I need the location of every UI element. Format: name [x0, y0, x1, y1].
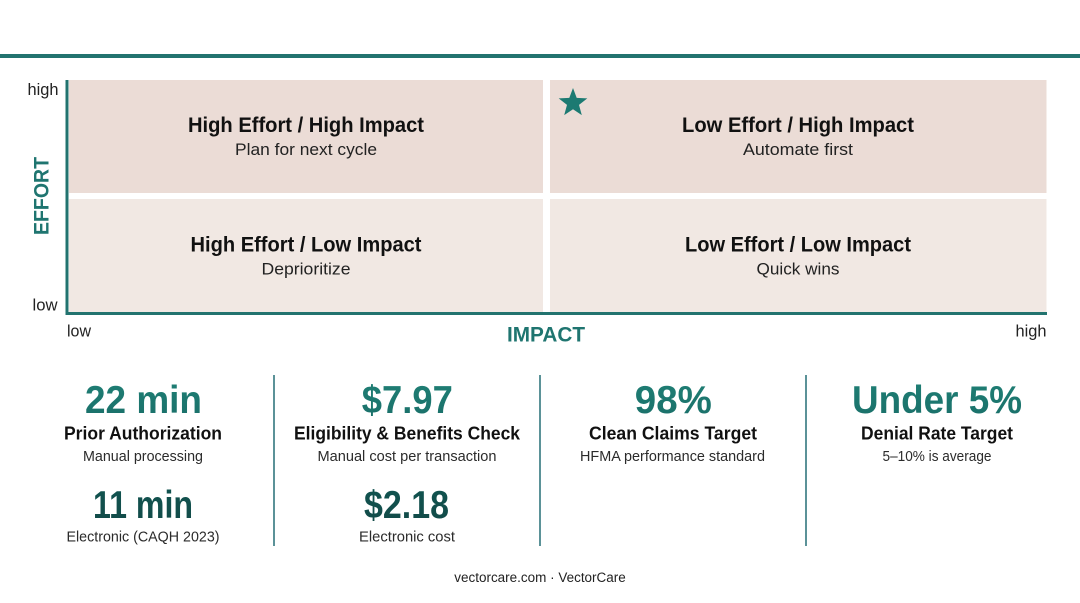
- y axis low label: low: [32, 297, 58, 315]
- divider 3: [805, 375, 807, 546]
- stat: eligibility and benefits check: $7.97: [362, 379, 453, 422]
- stat: clean claims target: HFMA performance standard: [580, 449, 765, 465]
- x axis low label: low: [67, 322, 91, 340]
- stat: prior authorization: Electronic (CAQH 2023): [66, 530, 220, 546]
- quadrant: high effort high impact: High Effort / High Impact: [188, 114, 424, 137]
- stat: denial rate target: [852, 379, 1022, 465]
- stat: prior authorization: Prior Authorization: [64, 423, 222, 443]
- stats row: [64, 375, 1022, 546]
- top rule: [0, 54, 1080, 58]
- quadrant: low effort high impact: [550, 80, 1046, 193]
- stat: eligibility and benefits check: Electronic cost: [359, 530, 455, 546]
- icon: star: [559, 88, 587, 115]
- quadrant: low effort high impact: Automate first: [743, 140, 853, 159]
- axes lines: [67, 80, 1047, 314]
- stat: clean claims target: [580, 379, 765, 465]
- stat: denial rate target: Denial Rate Target: [861, 423, 1013, 443]
- quadrant: low effort low impact: Quick wins: [756, 260, 840, 279]
- quadrant: high effort high impact: Plan for next cycle: [235, 140, 377, 159]
- divider 2: [539, 375, 541, 546]
- stat: clean claims target: 98%: [635, 379, 712, 422]
- stat: eligibility and benefits check: Eligibility & Benefits Check: [294, 423, 521, 443]
- stat: eligibility and benefits check: $2.18: [364, 484, 449, 527]
- stat: eligibility and benefits check: [294, 379, 521, 546]
- x axis title: IMPACT: [507, 323, 585, 346]
- quadrant: high effort high impact: [69, 80, 543, 193]
- divider 1: [273, 375, 275, 546]
- stat: prior authorization: 11 min: [93, 484, 193, 527]
- y axis high label: high: [28, 81, 58, 99]
- quadrant: high effort low impact: Deprioritize: [262, 260, 350, 279]
- stat: prior authorization: 22 min: [85, 379, 202, 422]
- matrix chart: [28, 80, 1047, 346]
- footer: vectorcare.com · VectorCare: [454, 570, 626, 585]
- stat: denial rate target: 5–10% is average: [882, 449, 992, 465]
- quadrant: high effort low impact: High Effort / Low Impact: [190, 234, 422, 256]
- y axis title: EFFORT: [30, 157, 54, 235]
- x axis high label: high: [1016, 322, 1046, 340]
- stat: denial rate target: Under 5%: [852, 379, 1022, 422]
- quadrant: low effort low impact: [550, 199, 1046, 312]
- stat: prior authorization: [64, 379, 222, 546]
- quadrant: low effort low impact: Low Effort / Low Impact: [685, 234, 911, 256]
- quadrant: high effort low impact: [69, 199, 543, 312]
- stat: prior authorization: Manual processing: [83, 449, 203, 465]
- quadrant: low effort high impact: Low Effort / High Impact: [682, 114, 914, 137]
- stat: clean claims target: Clean Claims Target: [589, 423, 757, 443]
- stat: eligibility and benefits check: Manual cost per transaction: [318, 449, 496, 465]
